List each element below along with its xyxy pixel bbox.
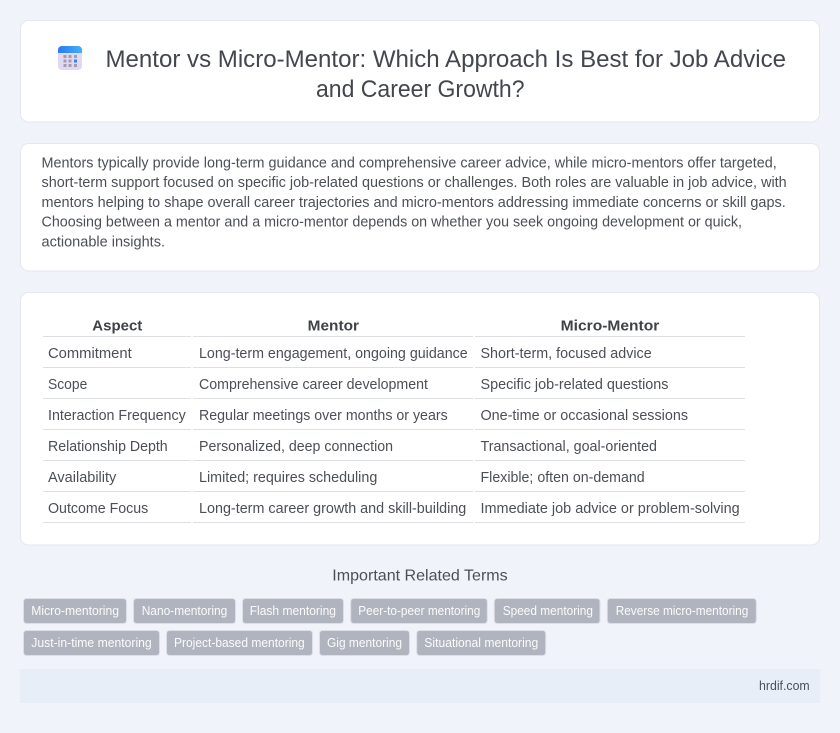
table header row: Mentor (308, 318, 359, 334)
tag: speed mentoring (494, 598, 600, 624)
text block: introduction paragraph (42, 156, 787, 250)
panel: introduction (20, 144, 820, 271)
tag: nano-mentoring: Nano-mentoring (142, 604, 227, 618)
tag: flash mentoring (242, 598, 344, 624)
tag: peer-to-peer mentoring: Peer-to-peer mentoring (358, 604, 480, 618)
table row: outcome focus: Outcome Focus (48, 501, 148, 517)
table header row: Aspect (92, 318, 142, 334)
table row: interaction frequency: Interaction Frequency (48, 408, 186, 424)
tag: gig mentoring: Gig mentoring (327, 636, 402, 650)
table header row (43, 318, 745, 337)
table row: scope: Scope (48, 377, 87, 393)
panel: header (20, 20, 820, 122)
table row: relationship depth: Relationship Depth (48, 439, 168, 455)
table row: availability: Limited; requires scheduling (199, 470, 377, 486)
table row: interaction frequency: Regular meetings over months or years (199, 408, 448, 424)
tag: speed mentoring: Speed mentoring (503, 604, 593, 618)
title (106, 46, 786, 103)
tag: peer-to-peer mentoring (351, 598, 487, 624)
table row: outcome focus: Immediate job advice or problem-solving (480, 501, 740, 517)
table row: interaction frequency (43, 408, 745, 430)
table row: relationship depth (43, 439, 745, 461)
tag: micro-mentoring: Micro-mentoring (31, 604, 119, 618)
table header row: Micro-Mentor (561, 318, 660, 334)
heading: important related terms: Important Related Terms (332, 568, 508, 584)
table row: commitment: Short-term, focused advice (480, 346, 652, 362)
text block: introduction paragraph: actionable insights. (42, 234, 165, 250)
table row: relationship depth: Transactional, goal-oriented (480, 439, 657, 455)
table row: scope: Specific job-related questions (480, 377, 668, 393)
tag: reverse micro-mentoring (607, 598, 756, 624)
tag: nano-mentoring (134, 598, 236, 624)
table row: availability: Flexible; often on-demand (480, 470, 645, 486)
table row: outcome focus: Long-term career growth and skill-building (199, 501, 466, 517)
icon: calendar (58, 46, 82, 70)
tag: just-in-time mentoring: Just-in-time mentoring (31, 636, 152, 650)
tag: gig mentoring (320, 630, 410, 656)
tag: flash mentoring: Flash mentoring (250, 604, 336, 618)
text block: introduction paragraph: mentors helping to shape overall career trajectories and micro-mentors addressing immediate concerns or skill gaps. (42, 195, 786, 211)
tag: micro-mentoring (24, 598, 126, 624)
table row: commitment (43, 346, 745, 368)
text block: introduction paragraph: Choosing between a mentor and a micro-mentor depends on whether you seek ongoing development or quick, (42, 214, 742, 230)
table row: availability: Availability (48, 470, 117, 486)
table row: commitment: Long-term engagement, ongoing guidance (199, 346, 468, 362)
table row: relationship depth: Personalized, deep connection (199, 439, 393, 455)
table row: scope (43, 377, 745, 399)
text block: introduction paragraph: Mentors typically provide long-term guidance and comprehensive career advice, while micro-mentors offer targeted, (42, 156, 777, 172)
title: and Career Growth? (316, 76, 524, 103)
title: Mentor vs Micro-Mentor: Which Approach Is Best for Job Advice (106, 46, 786, 73)
tag list (24, 598, 756, 656)
table row: interaction frequency: One-time or occasional sessions (480, 408, 688, 424)
table row: commitment: Commitment (48, 346, 132, 362)
footer source text: hrdif.com (759, 679, 810, 693)
tag: situational mentoring: Situational mentoring (424, 636, 538, 650)
tag: situational mentoring (417, 630, 546, 656)
table row: outcome focus (43, 501, 745, 523)
table row: scope: Comprehensive career development (199, 377, 428, 393)
tag: project-based mentoring: Project-based mentoring (174, 636, 305, 650)
text block: introduction paragraph: short-term support focused on specific job-related questions or challenges. Both roles are valuable in job advice, with (42, 175, 787, 191)
tag: project-based mentoring (166, 630, 312, 656)
footer (20, 669, 820, 703)
table row: availability (43, 470, 745, 492)
panel: comparison table (20, 292, 820, 545)
tag: just-in-time mentoring (24, 630, 160, 656)
tag: reverse micro-mentoring: Reverse micro-mentoring (616, 604, 748, 618)
